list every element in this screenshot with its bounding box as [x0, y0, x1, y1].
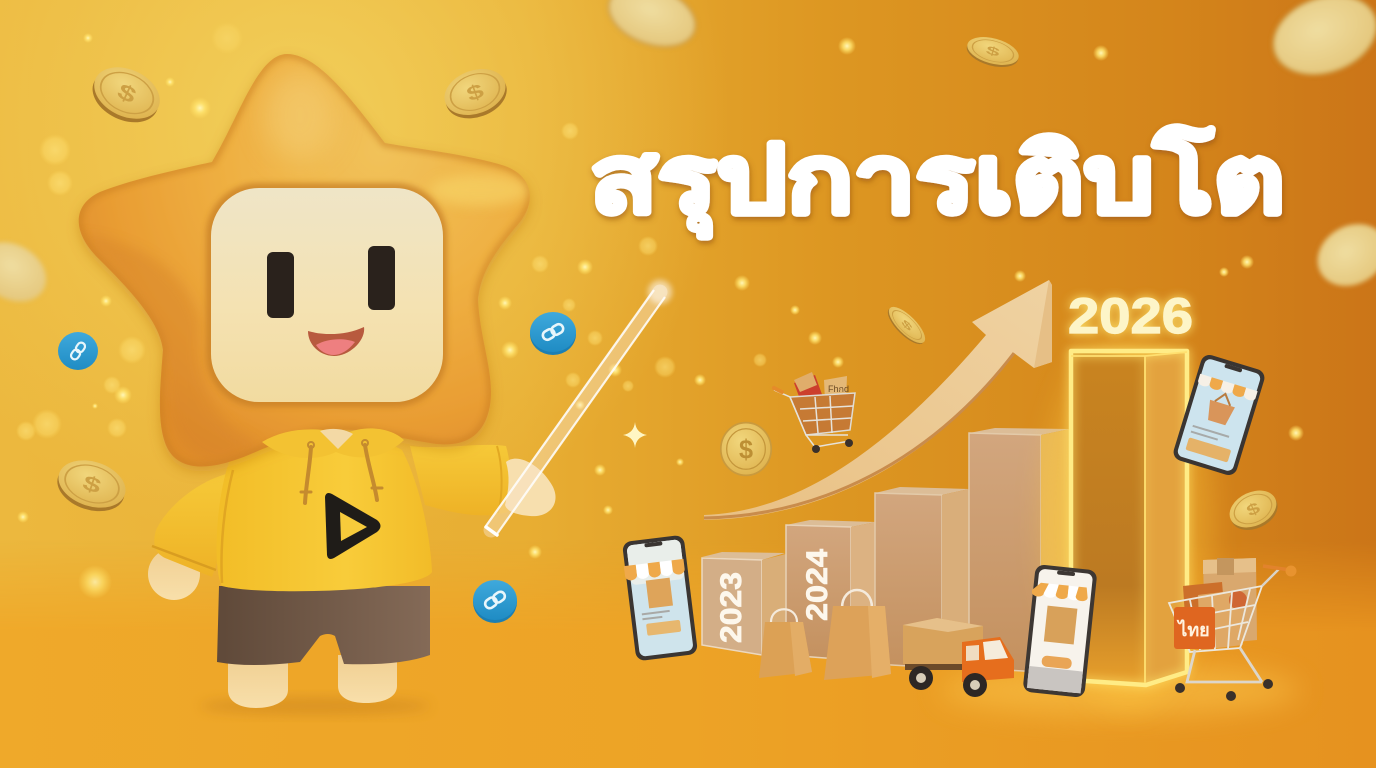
coin left: $ — [80, 470, 104, 498]
coin above arrow — [883, 302, 930, 349]
hoodie body — [217, 438, 432, 591]
coin top right: $ — [985, 44, 1001, 60]
left eye — [267, 252, 294, 318]
icon: link badge bottom — [473, 580, 517, 623]
face panel — [211, 188, 443, 402]
glowing pointer wand — [486, 280, 672, 535]
icon: right phone — [1171, 353, 1267, 477]
blue link badges — [58, 312, 576, 623]
rising arrow — [704, 280, 1052, 520]
Thai label on cart — [1174, 607, 1215, 649]
drawstrings — [301, 440, 382, 503]
label 2026: 2026 — [1068, 288, 1193, 344]
title: สรุปการเติบโต — [590, 125, 1285, 238]
right arm — [410, 445, 511, 515]
left hand — [148, 548, 200, 600]
coin top left: $ — [114, 78, 140, 108]
blurred coins in the background — [0, 0, 1376, 313]
face groove — [206, 183, 447, 407]
legs — [228, 655, 397, 708]
coin near cart — [721, 423, 771, 475]
mascot — [79, 54, 672, 715]
bar 2025 — [875, 487, 969, 668]
mouth — [308, 327, 364, 356]
right eye — [368, 246, 395, 310]
label 2023: 2023 — [715, 572, 748, 643]
icon: large shopping bag — [824, 590, 891, 680]
bar 2024 — [786, 520, 876, 660]
coin near cart: $ — [739, 436, 753, 465]
icon: small floating cart — [774, 372, 855, 453]
icon: left phone — [621, 535, 698, 661]
hood collar — [262, 428, 404, 458]
icon: link badge left — [58, 332, 98, 370]
bar unnamed tall — [969, 428, 1070, 672]
bar 2026 glowing — [1043, 288, 1213, 710]
Thai label on cart: ไทย — [1176, 619, 1210, 640]
coin right: $ — [1244, 499, 1263, 520]
coin above arrow: $ — [899, 317, 915, 333]
icon: link badge right — [530, 312, 576, 355]
icon: delivery truck — [903, 618, 1014, 697]
left sleeve — [154, 474, 232, 577]
coin top centre: $ — [464, 79, 487, 106]
icon: large shopping cart — [1169, 558, 1296, 701]
right hand — [505, 459, 556, 516]
coin top centre — [438, 61, 513, 126]
coin left — [51, 452, 132, 519]
bar 2023 — [702, 552, 786, 655]
ground shadow — [200, 697, 430, 715]
star head — [79, 54, 530, 466]
play logo on hoodie — [325, 493, 380, 559]
icon: small shopping bag — [759, 609, 812, 678]
icon: middle phone — [1021, 564, 1098, 698]
bokeh sparkles — [16, 22, 1304, 599]
shorts — [217, 586, 430, 665]
icon: small floating cart: Fhกd — [828, 384, 849, 394]
coin right — [1224, 483, 1284, 537]
coin top left — [84, 57, 168, 132]
growth chart — [702, 280, 1213, 710]
coin top right — [964, 32, 1022, 72]
label 2024: 2024 — [801, 549, 834, 621]
